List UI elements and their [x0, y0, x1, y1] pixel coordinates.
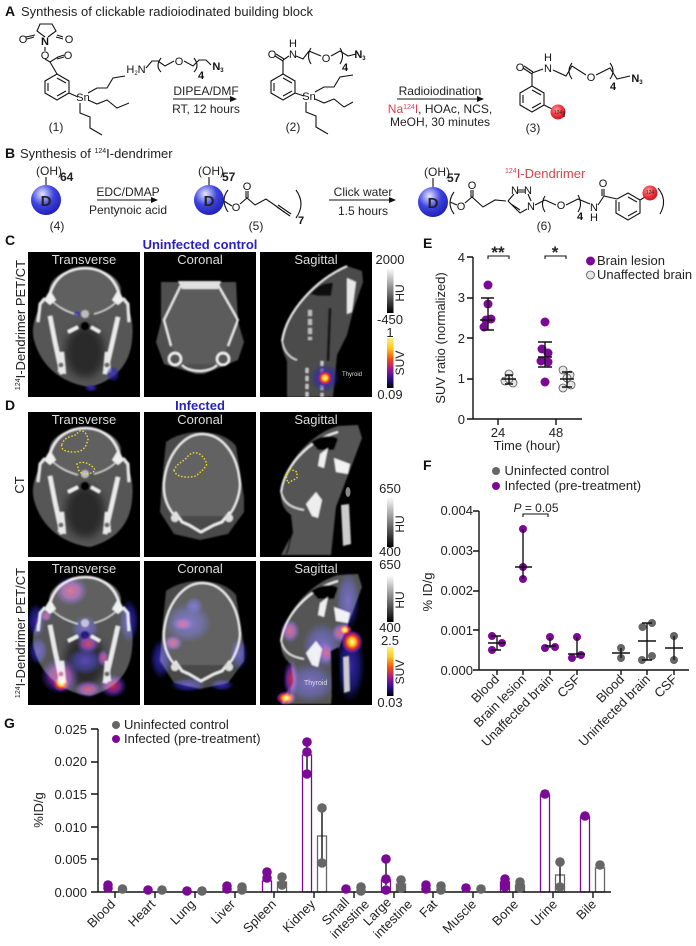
reaction arrow: EDC/DMAP — [89, 185, 167, 217]
panel E: SUV ratio chart: SUV ratio (normalized) — [433, 272, 448, 404]
compound 3: O — [516, 62, 525, 74]
panel F: % ID/g chart: 0.002 — [440, 583, 473, 598]
compound 4: dendrimer: (4) — [50, 219, 64, 233]
panel B heading — [5, 145, 173, 161]
compound 2: 4 — [342, 62, 349, 74]
reaction arrow: radioiodination: , HOAc, NCS, — [418, 102, 492, 116]
compound 3: O — [587, 72, 596, 84]
colorbars: PET HU and SUV: 2.5 — [381, 633, 399, 648]
colorbar: CT HU: HU — [393, 515, 407, 533]
image: control sagittal — [260, 252, 372, 397]
panel B heading: 124 — [94, 148, 106, 155]
image: infected CT sagittal: Sagittal — [294, 412, 338, 427]
compound 1: (1) — [49, 120, 63, 134]
reaction arrow: EDC/DMAP: Pentynoic acid — [89, 203, 167, 217]
compound 2 — [268, 38, 366, 134]
compound 5: alkyne dendrimer: O — [232, 202, 241, 214]
colorbars: PET HU and SUV: 0.03 — [377, 695, 403, 710]
compound 6: 124I-dendrimer: O — [557, 200, 566, 212]
panel E: SUV ratio chart: 2 — [458, 331, 465, 346]
reaction arrow: radioiodination: I — [415, 102, 418, 116]
compound 1: N — [41, 36, 49, 48]
compound 3: 124 — [554, 110, 562, 116]
compound 5: alkyne dendrimer: (5) — [249, 219, 263, 233]
panel F: % ID/g chart: CSF — [651, 671, 680, 701]
panel A heading: Synthesis of clickable radioiodinated building block — [21, 4, 313, 19]
image: infected PET transverse — [28, 561, 140, 705]
x labels: Spleen — [240, 897, 279, 936]
legend E: Brain lesion — [597, 253, 665, 268]
panel G: biodistribution bar chart: 0.015 — [54, 787, 87, 802]
panel E: SUV ratio chart: ** — [491, 243, 505, 262]
compound 5: alkyne dendrimer: 57 — [222, 170, 236, 184]
reaction arrow: amide coupling: RT, 12 hours — [172, 102, 240, 116]
x labels: Small — [319, 894, 352, 928]
compound 4: dendrimer: (OH) — [36, 164, 62, 178]
panel G: biodistribution bar chart: 0.020 — [54, 754, 87, 769]
reaction arrow: click — [329, 185, 396, 218]
compound 1: Sn — [76, 92, 90, 104]
panel F: % ID/g chart: Brain lesion — [470, 672, 529, 730]
compound 6: 124I-dendrimer: N — [527, 201, 535, 213]
colorbars: panel C: 1 — [386, 325, 394, 340]
image: control transverse — [28, 252, 140, 397]
panel E: SUV ratio chart: 4 — [458, 250, 465, 265]
image: control sagittal: Thyroid — [342, 372, 362, 378]
image: infected CT transverse: Transverse — [52, 412, 116, 427]
compound 3: N — [631, 73, 639, 85]
panel B heading: B — [5, 145, 15, 161]
legend G: Uninfected control — [124, 717, 229, 732]
panel G: biodistribution bar chart: G — [4, 715, 15, 731]
compound 1: O — [64, 50, 73, 62]
legend G — [112, 717, 261, 746]
panel G: biodistribution bar chart: %ID/g — [31, 792, 46, 828]
panel F: % ID/g chart: % ID/g — [420, 572, 435, 612]
x labels: Lung — [167, 897, 198, 928]
image: infected PET sagittal: Thyroid — [304, 680, 327, 687]
colorbars: panel C: 2000 — [376, 252, 404, 267]
compound 5: alkyne dendrimer — [194, 164, 304, 233]
legend F: Uninfected control — [504, 463, 609, 478]
panel D side labels: 124 — [15, 686, 22, 698]
x labels: Liver — [208, 896, 239, 927]
panel D side labels — [12, 476, 28, 698]
compound 1 — [19, 24, 224, 135]
panel B heading: Synthesis of — [20, 146, 91, 161]
panel D heading: Infected — [175, 398, 225, 413]
legend E: Unaffected brain — [597, 267, 692, 282]
compound 3: (3) — [526, 121, 540, 135]
panel C heading: C — [5, 232, 15, 248]
image: control sagittal: Sagittal — [294, 252, 338, 267]
panel E: SUV ratio chart: 24 — [491, 425, 505, 440]
compound 5: alkyne dendrimer: 7 — [298, 215, 304, 227]
compound 6: 124I-dendrimer: 124 — [505, 168, 517, 175]
legend G: Infected (pre-treatment) — [124, 731, 261, 746]
reaction arrow: amide coupling: DIPEA/DMF — [173, 84, 239, 98]
colorbar: CT HU: 400 — [379, 544, 401, 559]
panel F: % ID/g chart: 0.003 — [440, 543, 473, 558]
image: control coronal: Coronal — [177, 252, 223, 267]
panel F: % ID/g chart: CSF — [554, 671, 583, 701]
panel F: % ID/g chart: Unaffected brain — [478, 672, 556, 749]
compound 3: I — [563, 110, 565, 119]
compound 1: O — [41, 50, 50, 62]
panel G: biodistribution bar chart: 0.010 — [54, 820, 87, 835]
compound 6: 124I-dendrimer: 4 — [577, 211, 584, 223]
image: infected CT coronal: Coronal — [177, 412, 223, 427]
panel E: SUV ratio chart: E — [423, 235, 432, 251]
image: infected CT sagittal — [260, 412, 372, 557]
compound 1: O — [175, 56, 184, 68]
compound 1: N — [138, 64, 146, 76]
x labels: intestine — [327, 897, 372, 941]
compound 2: H — [289, 38, 297, 50]
panel F: % ID/g chart — [420, 457, 689, 749]
panel F: % ID/g chart: Blood — [593, 672, 627, 706]
x labels: intestine — [370, 897, 415, 941]
colorbars: panel C: -450 — [377, 312, 403, 327]
compound 3: 4 — [610, 81, 617, 93]
panel C side label: I-Dendrimer PET/CT — [13, 260, 28, 378]
colorbars: panel C: 0.09 — [377, 387, 403, 402]
reaction arrow: EDC/DMAP: EDC/DMAP — [96, 185, 160, 199]
compound 5: alkyne dendrimer: O — [243, 181, 252, 193]
x labels: Heart — [125, 896, 158, 930]
image: infected PET transverse: Transverse — [52, 561, 116, 576]
compound 6: 124I-dendrimer: (OH) — [424, 165, 450, 179]
compound 2: N — [289, 49, 297, 61]
reaction arrow: radioiodination: MeOH, 30 minutes — [390, 115, 490, 129]
reaction arrow: radioiodination: Radioiodination — [399, 84, 481, 98]
compound 6: 124I-dendrimer — [418, 165, 664, 233]
x labels: Large — [360, 895, 394, 929]
compound 1: H — [126, 64, 134, 76]
image: control transverse: Transverse — [52, 252, 116, 267]
panel F: % ID/g chart: 0.000 — [440, 663, 473, 678]
x labels: Fat — [416, 896, 440, 920]
bars — [262, 755, 604, 892]
x labels — [84, 894, 599, 941]
panel D heading: D — [5, 397, 15, 413]
panel D side labels: CT — [12, 476, 27, 494]
x labels: Blood — [84, 897, 118, 931]
image: infected PET sagittal — [260, 561, 372, 705]
panel E: SUV ratio chart: * — [552, 243, 559, 262]
compound 4: dendrimer — [31, 164, 74, 233]
compound 3: N — [544, 63, 552, 75]
compound 2: Sn — [302, 91, 316, 103]
colorbars: PET HU and SUV: SUV — [393, 660, 407, 684]
reaction arrow: radioiodination: Na — [388, 102, 418, 116]
panel B heading: I-dendrimer — [106, 146, 173, 161]
colorbars: PET HU and SUV: 650 — [379, 557, 401, 572]
image: infected CT transverse — [28, 412, 140, 557]
compound 3: 3 — [639, 80, 643, 86]
panel E: SUV ratio chart — [423, 235, 692, 453]
image: control coronal — [144, 252, 256, 397]
compound 6: 124I-dendrimer: O — [468, 180, 477, 192]
compound 2: O — [268, 49, 277, 61]
image: infected PET coronal: Coronal — [177, 561, 223, 576]
colorbar: CT HU: 650 — [379, 481, 401, 496]
panel F: % ID/g chart: F — [423, 457, 432, 473]
compound 2: (2) — [286, 120, 300, 134]
x labels: Bone — [489, 897, 521, 929]
panel D side labels: I-Dendrimer PET/CT — [13, 568, 28, 686]
panel E: SUV ratio chart: 3 — [458, 290, 465, 305]
colorbars: panel C: SUV — [393, 351, 407, 375]
compound 6: 124I-dendrimer: N — [511, 185, 519, 197]
compound 2: 3 — [362, 56, 366, 62]
x labels: Urine — [528, 897, 560, 929]
unaffected brain points — [501, 366, 575, 392]
compound 4: dendrimer: D — [41, 193, 52, 210]
panel F: % ID/g chart: 0.001 — [440, 623, 473, 638]
compound 4: dendrimer: 64 — [60, 170, 74, 184]
compound 6: 124I-dendrimer: O — [599, 178, 608, 190]
reaction arrow: radioiodination — [388, 84, 492, 129]
brain lesion points — [480, 280, 552, 386]
compound 1: O — [19, 34, 28, 46]
compound 1: 4 — [198, 70, 205, 82]
colorbars: PET HU and SUV: 400 — [379, 620, 401, 635]
panel A heading: A — [5, 3, 15, 19]
legend F — [492, 463, 641, 493]
panel F: % ID/g chart: 0.004 — [440, 503, 473, 518]
panel F: % ID/g chart: Blood — [468, 672, 502, 706]
image: infected PET coronal — [144, 561, 256, 705]
colorbars: PET HU and SUV: HU — [393, 591, 407, 609]
panel G: biodistribution bar chart: 0.025 — [54, 722, 87, 737]
panel G: biodistribution bar chart: 0.000 — [54, 885, 87, 900]
reaction arrow: amide coupling — [172, 84, 240, 116]
panel F: % ID/g chart: P = 0.05 — [513, 501, 559, 515]
compound 6: 124I-dendrimer: H — [590, 212, 598, 224]
compound 5: alkyne dendrimer: D — [204, 193, 215, 210]
panel C heading: Uninfected control — [143, 237, 257, 252]
uninfected points — [118, 803, 605, 896]
compound 6: 124I-dendrimer: O — [457, 201, 466, 213]
panel E: SUV ratio chart: 0 — [458, 412, 465, 427]
colorbars: PET HU and SUV — [377, 557, 407, 710]
panel G: biodistribution bar chart — [4, 715, 611, 941]
reaction arrow: click: 1.5 hours — [338, 204, 388, 218]
legend E — [586, 253, 692, 282]
compound 6: 124I-dendrimer: 124 — [646, 190, 654, 196]
panel E: SUV ratio chart: 1 — [458, 371, 465, 386]
panel E: SUV ratio chart: Time (hour) — [494, 438, 560, 453]
compound 1: N — [212, 61, 220, 73]
compound 3 — [516, 52, 643, 135]
colorbars: panel C: HU — [393, 284, 407, 302]
x labels: Bile — [573, 897, 599, 922]
compound 6: 124I-dendrimer: I-Dendrimer — [517, 166, 586, 181]
compound 6: 124I-dendrimer: N — [524, 185, 532, 197]
panel D heading — [5, 397, 225, 413]
colorbar: CT HU — [379, 481, 407, 559]
panel C heading — [5, 232, 257, 252]
x labels: Muscle — [439, 897, 479, 936]
compound 6: 124I-dendrimer: 57 — [447, 171, 461, 185]
compound 6: 124I-dendrimer: N — [590, 202, 598, 214]
compound 1: 2 — [134, 71, 138, 77]
compound 1: 3 — [220, 68, 224, 74]
compound 2: N — [354, 49, 362, 61]
compound 5: alkyne dendrimer: (OH) — [198, 164, 224, 178]
compound 2: O — [322, 53, 331, 65]
panel G: biodistribution bar chart: 0.005 — [54, 852, 87, 867]
legend F: Infected (pre-treatment) — [504, 478, 641, 493]
image: infected PET sagittal: Sagittal — [294, 561, 338, 576]
compound 6: 124I-dendrimer: (6) — [537, 219, 551, 233]
colorbars: panel C — [376, 252, 407, 402]
panel C side label: 124 — [15, 378, 22, 390]
compound 6: 124I-dendrimer: D — [428, 195, 439, 212]
reaction arrow: click: Click water — [334, 185, 392, 199]
infected points — [103, 737, 590, 896]
compound 1: O — [65, 34, 74, 46]
image: infected CT coronal — [144, 412, 256, 557]
reaction arrow: radioiodination: 124 — [403, 104, 415, 111]
panel F: % ID/g chart: Uninfected brain — [576, 672, 653, 749]
panel E: SUV ratio chart: 48 — [549, 425, 563, 440]
x labels: Kidney — [279, 896, 318, 935]
compound 3: H — [544, 52, 552, 64]
